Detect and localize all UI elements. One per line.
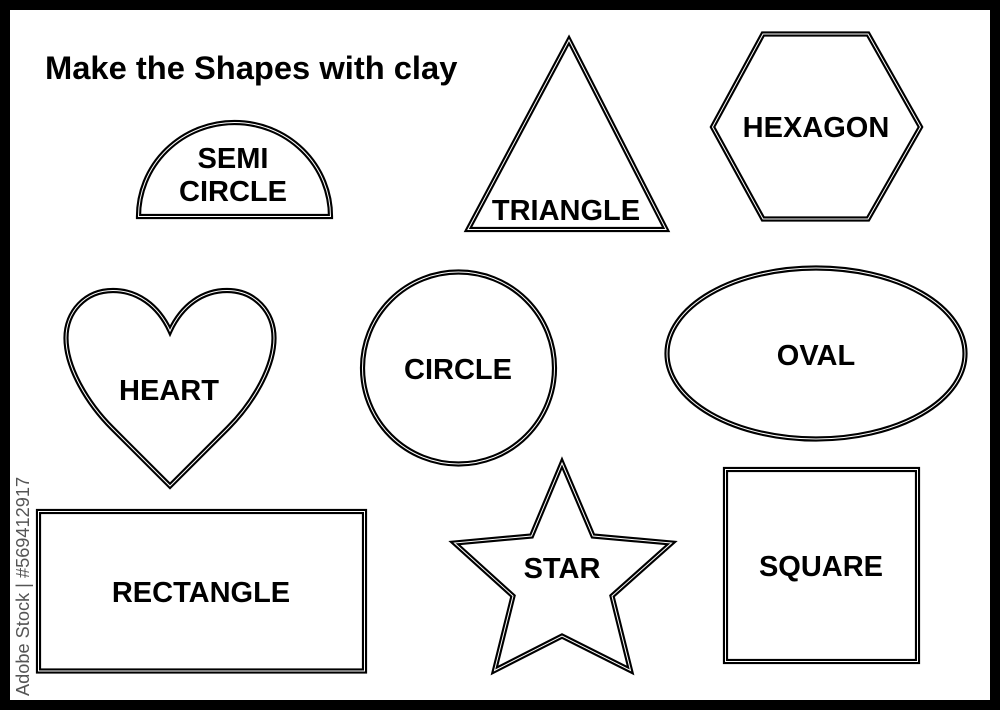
shape: rectangle [38,512,364,671]
shape: circle: CIRCLE [404,354,512,386]
shape: semi circle: CIRCLE [179,176,287,208]
shape: hexagon [712,34,920,219]
shape: semi circle [138,122,330,216]
shape: oval: OVAL [777,340,855,372]
shape: oval [667,268,965,439]
shape: rectangle: RECTANGLE [112,577,290,609]
shape: circle [362,272,554,464]
shape: square [726,470,918,662]
shape: heart [66,290,274,486]
shape: square: SQUARE [759,551,883,583]
shape: heart: HEART [119,375,219,407]
shape: star [454,463,672,670]
shape: triangle: TRIANGLE [492,195,640,227]
title: Make the Shapes with clay [45,49,457,86]
shape: triangle [468,40,666,230]
shape: star: STAR [524,553,600,585]
vertical stock id text: Adobe Stock | #569412917 [13,477,33,696]
shape: hexagon: HEXAGON [743,112,889,144]
shape: semi circle: SEMI [198,143,268,175]
